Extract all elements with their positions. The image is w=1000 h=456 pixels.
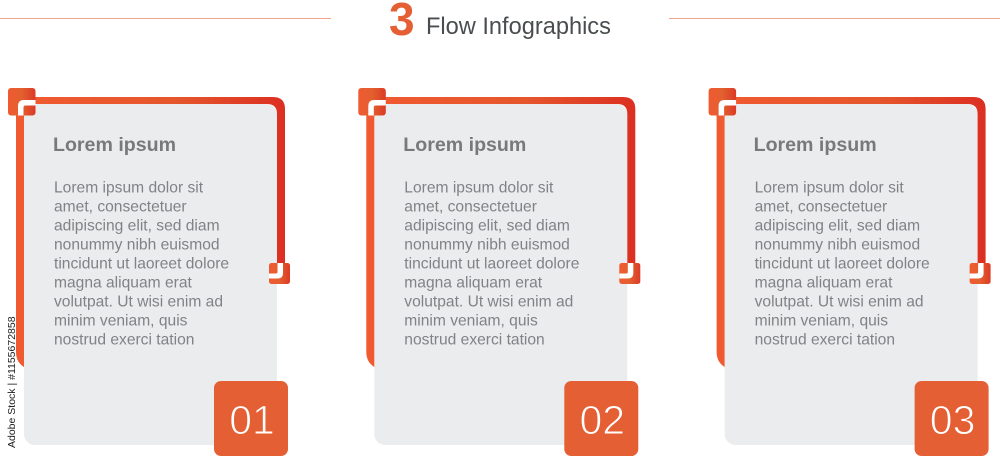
- body text: nostrud exerci tation: [404, 332, 545, 348]
- body text: nonummy nibh euismod: [404, 236, 570, 254]
- card background: [725, 104, 978, 445]
- heading: Lorem ipsum: [403, 134, 526, 156]
- body text: adipiscing elit, sed diam: [404, 218, 570, 234]
- body text: volutpat. Ut wisi enim ad: [755, 294, 924, 310]
- body text: minim veniam, quis: [404, 312, 538, 330]
- number badge: [564, 381, 638, 456]
- body text: Lorem ipsum dolor sit: [404, 180, 554, 196]
- body text: Lorem ipsum dolor sit: [54, 180, 204, 196]
- body text: tincidunt ut laoreet dolore: [755, 256, 930, 272]
- number badge: [915, 381, 989, 456]
- body text: adipiscing elit, sed diam: [755, 218, 920, 234]
- red frame: [16, 97, 285, 367]
- body text: amet, consectetuer: [404, 198, 537, 216]
- stock id label: Adobe Stock | #1155672858: [6, 316, 18, 448]
- body text: volutpat. Ut wisi enim ad: [54, 294, 223, 310]
- heading: Lorem ipsum: [754, 134, 877, 156]
- number badge: [214, 381, 288, 456]
- body text: tincidunt ut laoreet dolore: [404, 256, 579, 272]
- body text: nostrud exerci tation: [54, 332, 194, 348]
- corner marker right: [970, 263, 991, 284]
- heading: Lorem ipsum: [53, 134, 176, 156]
- body text: adipiscing elit, sed diam: [54, 218, 220, 234]
- body text: amet, consectetuer: [54, 198, 187, 216]
- red frame: [366, 97, 635, 367]
- number badge: 01: [229, 397, 275, 443]
- body text: magna aliquam erat: [54, 274, 192, 292]
- title: [389, 0, 611, 45]
- body text: magna aliquam erat: [404, 274, 543, 292]
- red frame: [717, 97, 986, 367]
- body text: nonummy nibh euismod: [755, 236, 920, 254]
- card background: [24, 104, 277, 445]
- corner marker top left: [709, 88, 736, 116]
- body text: Lorem ipsum dolor sit: [755, 180, 904, 196]
- corner marker top left: [358, 88, 386, 116]
- panel: step 01: [8, 88, 290, 456]
- panel: step 02: [358, 88, 640, 456]
- body text: magna aliquam erat: [755, 274, 893, 292]
- corner marker top left: [8, 88, 36, 116]
- body text: tincidunt ut laoreet dolore: [54, 256, 229, 272]
- body text: minim veniam, quis: [755, 312, 888, 330]
- panel: step 03: [709, 88, 991, 456]
- body text: nostrud exerci tation: [755, 332, 895, 348]
- number badge: 02: [579, 397, 625, 443]
- corner marker right: [269, 263, 290, 284]
- card background: [374, 104, 627, 445]
- title: Flow Infographics: [426, 14, 611, 40]
- body text: minim veniam, quis: [54, 312, 188, 330]
- corner marker right: [619, 263, 640, 284]
- header rule left: [0, 18, 331, 19]
- body text: nonummy nibh euismod: [54, 236, 220, 254]
- number badge: 03: [930, 397, 975, 443]
- header rule right: [669, 18, 1000, 19]
- body text: amet, consectetuer: [755, 198, 887, 216]
- body text: volutpat. Ut wisi enim ad: [404, 294, 573, 310]
